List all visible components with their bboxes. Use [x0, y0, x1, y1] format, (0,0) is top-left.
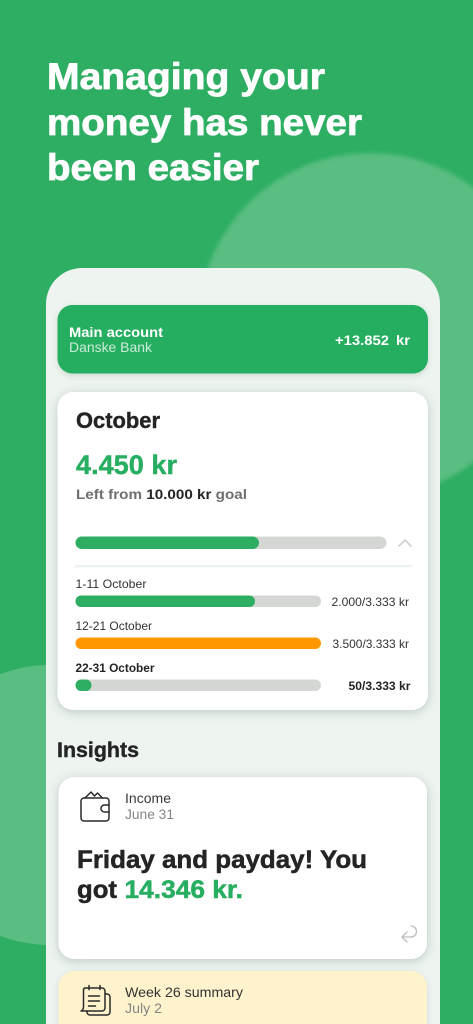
- account balance: kr: [396, 332, 411, 348]
- account name: Main account: [69, 324, 163, 340]
- insights heading: Insights: [57, 739, 139, 762]
- account balance: +13.852: [335, 332, 389, 348]
- goal text: Left from 10.000 kr goal: [76, 486, 247, 502]
- icon: return arrow: [402, 926, 416, 942]
- title: Managing your: [47, 56, 325, 97]
- icon: collapse chevron: [398, 540, 412, 546]
- period 1 label: 1-11 October: [76, 577, 146, 591]
- summary title: Week 26 summary: [125, 985, 243, 1000]
- insight card: income: [58, 777, 427, 959]
- period 1 value: 2.000/3.333 kr: [332, 595, 409, 609]
- insight card: weekly summary: [58, 971, 427, 1024]
- month heading: October: [76, 408, 160, 433]
- period 3 label: 22-31 October: [76, 661, 155, 675]
- title: money has never: [47, 102, 362, 143]
- summary date: July 2: [125, 1001, 162, 1016]
- insight message: got: [77, 876, 118, 904]
- background circle: top right: [198, 153, 473, 497]
- period 3 value: 50/3.333 kr: [348, 679, 411, 693]
- title: [47, 56, 362, 188]
- insight message: Friday and payday! You: [77, 846, 367, 874]
- icon: calendar notes: [81, 986, 110, 1015]
- phone panel: [46, 268, 440, 1024]
- insight message: 14.346 kr.: [124, 876, 243, 904]
- account balance: [335, 332, 411, 348]
- period 1 bar: [76, 596, 321, 607]
- title: been easier: [47, 147, 259, 188]
- bank name: Danske Bank: [69, 339, 153, 355]
- amount left: 4.450 kr: [76, 450, 177, 480]
- overall progress bar: [76, 536, 386, 549]
- insight message: [77, 846, 367, 904]
- icon: wallet: [81, 792, 109, 821]
- account card: [58, 305, 428, 374]
- date: June 31: [125, 807, 174, 822]
- period 3 bar: [76, 680, 321, 691]
- period 2 value: 3.500/3.333 kr: [332, 637, 409, 651]
- category: Income: [125, 791, 171, 806]
- period 2 bar: [76, 638, 321, 649]
- budget card: October: [58, 392, 428, 710]
- background circle: bottom left: [0, 665, 190, 945]
- period 2 label: 12-21 October: [76, 619, 152, 633]
